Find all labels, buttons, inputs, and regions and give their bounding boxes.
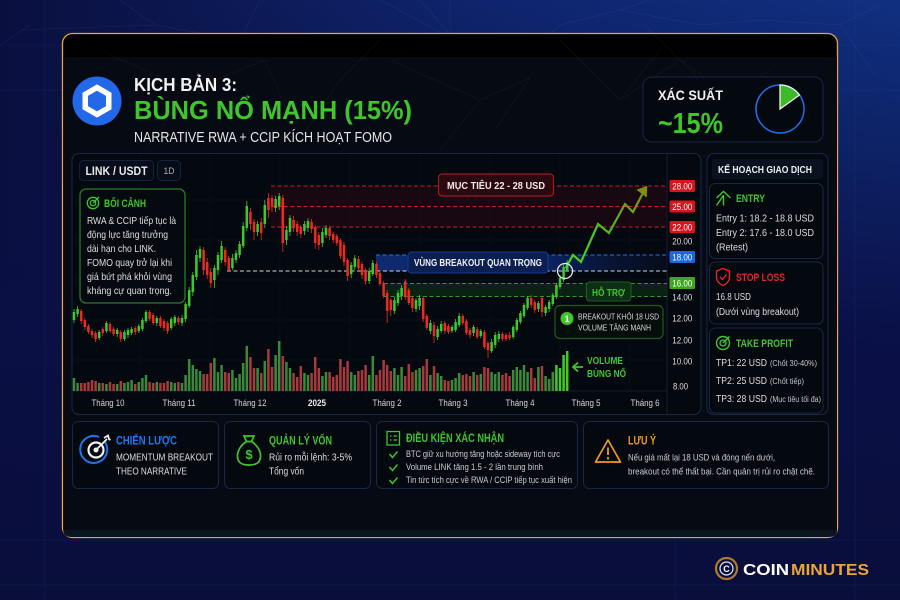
brand logo: coinminutes: COIN xyxy=(743,562,789,579)
panel: confirmation conditions: BTC giữ xu hướng tăng hoặc sideway tích cực xyxy=(406,449,560,459)
price axis: 28.00 xyxy=(672,182,692,192)
panel: probability: XÁC SUẤT xyxy=(658,87,723,103)
panel: capital management xyxy=(224,422,370,488)
take profit card: (Mục tiêu tối đa) xyxy=(770,395,821,404)
panel: confirmation conditions: ĐIỀU KIỆN XÁC NHẬN xyxy=(406,432,504,445)
take profit card: TAKE PROFIT xyxy=(736,338,793,350)
checkmarks xyxy=(390,452,398,484)
take profit card: (Chốt tiếp) xyxy=(770,377,804,386)
icon: entry arrow xyxy=(716,192,730,206)
title: BÙNG NỔ MẠNH (15%) xyxy=(134,95,412,125)
title: KỊCH BẢN 3: xyxy=(134,74,237,95)
time axis: 2025 xyxy=(308,398,327,409)
context box: kháng cự quan trọng. xyxy=(87,285,172,297)
label: target xyxy=(438,174,554,196)
title: NARRATIVE RWA + CCIP KÍCH HOẠT FOMO xyxy=(134,129,392,146)
breakout circle marker xyxy=(558,264,572,278)
context box: RWA & CCIP tiếp tục là xyxy=(87,215,176,227)
panel: warning: breakout có thể thất bại. Cần quản trị rủi ro chặt chẽ. xyxy=(628,466,815,476)
price axis: 8.00 xyxy=(673,382,688,392)
trade plan heading: KẾ HOẠCH GIAO DỊCH xyxy=(718,163,812,176)
callout: volume xyxy=(573,356,626,380)
take profit card: TP2: 25 USD xyxy=(716,375,767,387)
panel: capital management: Tổng vốn xyxy=(269,466,304,478)
time axis: Tháng 3 xyxy=(438,398,468,409)
context box: động lực tăng trưởng xyxy=(87,229,168,241)
panel: strategy: THEO NARRATIVE xyxy=(116,466,187,478)
price axis xyxy=(670,180,695,392)
icon: checklist xyxy=(387,432,400,445)
chart tabs: LINK / USDT xyxy=(86,164,148,178)
bullish projection arrow xyxy=(566,187,646,268)
take profit card xyxy=(710,328,823,413)
pie chart xyxy=(756,85,804,133)
price axis: 12.00 xyxy=(672,314,692,324)
time axis xyxy=(92,398,660,409)
logo: chainlink xyxy=(72,76,122,126)
panel: strategy: MOMENTUM BREAKOUT xyxy=(116,452,213,464)
entry card: Entry 2: 17.6 - 18.0 USD xyxy=(716,227,814,239)
panel: chart xyxy=(72,154,701,414)
context box: giá bứt phá khỏi vùng xyxy=(87,271,172,283)
callout: breakout: VOLUME TĂNG MẠNH xyxy=(578,324,651,332)
panel: strategy xyxy=(72,422,218,488)
icon: target arrow xyxy=(80,436,110,463)
title xyxy=(134,74,412,146)
panel: capital management: QUẢN LÝ VỐN xyxy=(269,434,332,448)
icon: warning triangle xyxy=(596,440,620,462)
label: support xyxy=(586,282,631,301)
price axis: 20.00 xyxy=(672,236,692,248)
chart tabs xyxy=(80,160,180,180)
icon: radar xyxy=(87,197,99,209)
time axis: Tháng 5 xyxy=(572,398,600,409)
chart tabs: 1D xyxy=(164,166,175,177)
panel: warning xyxy=(584,422,828,488)
time axis: Tháng 10 xyxy=(92,398,124,409)
volume bars xyxy=(74,341,567,391)
take profit card: (Chốt 30-40%) xyxy=(770,359,817,368)
callout: breakout: BREAKOUT KHỎI 18 USD xyxy=(578,312,659,322)
entry card: ENTRY xyxy=(736,193,766,205)
time axis: Tháng 6 xyxy=(630,398,660,409)
brand logo: coinminutes: C xyxy=(723,564,730,574)
take profit card: TP1: 22 USD xyxy=(716,357,767,369)
panel: probability: ~15% xyxy=(658,108,723,140)
price axis: 10.00 xyxy=(672,356,692,368)
icon: money bag xyxy=(237,436,261,465)
context box: dài hạn cho LINK. xyxy=(87,243,156,255)
icon: money bag: $ xyxy=(245,447,253,462)
panel: confirmation conditions xyxy=(376,422,578,488)
take profit card: TP3: 28 USD xyxy=(716,393,767,405)
stop loss card xyxy=(710,262,823,324)
candlesticks xyxy=(74,193,567,358)
time axis: Tháng 2 xyxy=(372,398,402,409)
price axis: 14.00 xyxy=(672,292,692,304)
panel: confirmation conditions: Tin tức tích cực về RWA / CCIP tiếp tục xuất hiện xyxy=(406,475,572,485)
stop loss card: STOP LOSS xyxy=(736,272,785,284)
icon: shield xyxy=(716,268,730,286)
label: support: HỖ TRỢ xyxy=(592,286,625,299)
stop loss card: (Dưới vùng breakout) xyxy=(716,306,799,318)
price axis: 16.00 xyxy=(672,278,692,290)
price axis: 25.00 xyxy=(672,202,692,213)
context box xyxy=(80,189,185,303)
label: target: MỤC TIÊU 22 - 28 USD xyxy=(447,179,545,192)
panel: trade plan xyxy=(707,154,828,414)
price axis: 18.00 xyxy=(672,252,692,264)
price axis: 12.00 xyxy=(672,336,692,346)
callout: breakout xyxy=(555,306,663,338)
support zone xyxy=(384,284,667,296)
price axis: 22.00 xyxy=(672,222,692,234)
panel: confirmation conditions: Volume LINK tăng 1.5 - 2 lần trung bình xyxy=(406,462,543,472)
main card xyxy=(62,25,838,538)
entry card: (Retest) xyxy=(716,242,748,254)
panel: capital management: Rủi ro mỗi lệnh: 3-5% xyxy=(269,450,352,464)
icon: target xyxy=(716,336,730,350)
panel: warning: Nếu giá mất lại 18 USD và đóng nến dưới, xyxy=(628,452,775,462)
label: breakout zone xyxy=(408,252,548,273)
panel: probability xyxy=(643,77,823,142)
callout: volume: VOLUME xyxy=(587,356,623,367)
panel: warning: LƯU Ý xyxy=(628,434,656,448)
stop loss card: 16.8 USD xyxy=(716,291,751,303)
panel: strategy: CHIẾN LƯỢC xyxy=(116,434,177,448)
entry card: Entry 1: 18.2 - 18.8 USD xyxy=(716,212,814,224)
context box: BỐI CẢNH xyxy=(104,196,146,210)
callout: volume: BÙNG NỔ xyxy=(587,367,626,380)
target zone xyxy=(271,186,667,227)
time axis: Tháng 11 xyxy=(162,398,196,409)
label: breakout zone: VÙNG BREAKOUT QUAN TRỌNG xyxy=(414,256,542,269)
time axis: Tháng 4 xyxy=(506,398,534,409)
entry card xyxy=(710,184,823,258)
brand logo: coinminutes xyxy=(716,558,869,579)
trade plan heading xyxy=(712,159,823,179)
time axis: Tháng 12 xyxy=(234,398,266,409)
brand logo: coinminutes: MINUTES xyxy=(791,562,869,579)
callout: breakout: 1 xyxy=(564,314,570,324)
breakout zone xyxy=(227,255,667,271)
context box: FOMO quay trở lại khi xyxy=(87,257,172,269)
